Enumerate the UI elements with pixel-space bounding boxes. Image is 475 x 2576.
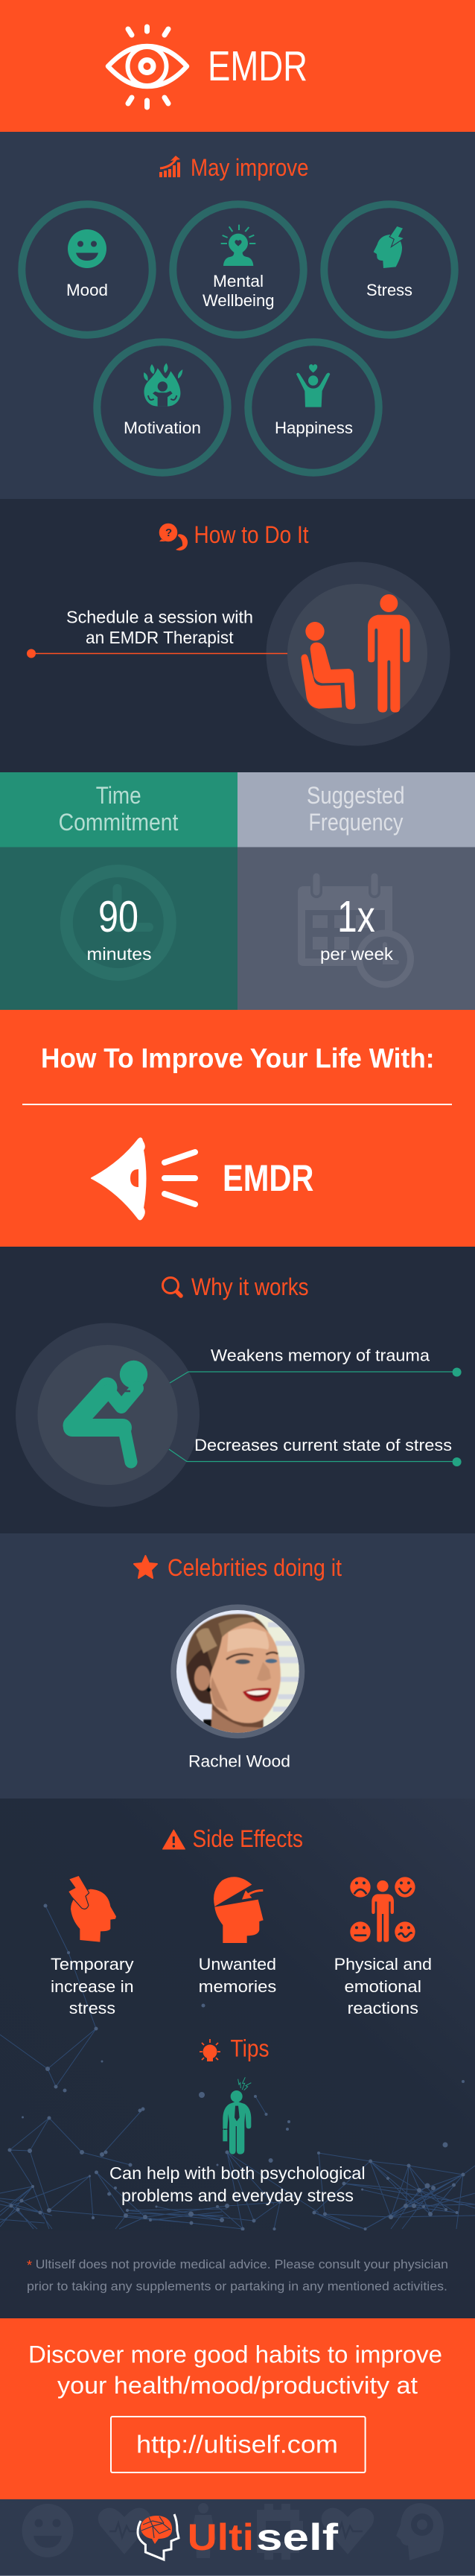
item: happiness: [248, 342, 379, 473]
callout: decreases stress: Decreases current state of stress: [194, 1436, 452, 1454]
panel: time commitment: [0, 772, 238, 1010]
item: mental wellbeing: Wellbeing: [203, 291, 274, 310]
label: rachel wood: Rachel Wood: [188, 1752, 290, 1771]
item: temporary increase in stress: stress: [69, 1999, 115, 2017]
text: tips: problems and everyday stress: [121, 2186, 354, 2205]
heading: tips: Tips: [231, 2035, 270, 2062]
panel: may improve: [0, 132, 475, 499]
heading: why it works: Why it works: [191, 1273, 308, 1300]
panel: side effects and tips: [0, 1799, 475, 2231]
text: disclaimer: prior to taking any supplements or partaking in any mentioned activities.: [27, 2279, 447, 2293]
heading: celebrities: Celebrities doing it: [168, 1554, 342, 1581]
item: physical and emotional reactions: emotional: [344, 1977, 421, 1996]
panel: call to action: [0, 2318, 475, 2499]
value: 90 minutes: minutes: [86, 944, 152, 964]
label: emdr: EMDR: [223, 1157, 313, 1199]
heading: tips: [200, 2035, 270, 2062]
callout: decreases stress: [169, 1436, 462, 1466]
heading: how to improve: How To Improve Your Life With:: [41, 1043, 435, 1074]
callout: weakens memory: [170, 1346, 462, 1383]
item: temporary increase in stress: Temporary: [51, 1955, 134, 1974]
text: schedule: an EMDR Therapist: [86, 628, 234, 647]
item: stress: Stress: [366, 281, 412, 299]
icon: clock: [66, 871, 170, 974]
label: time commitment: Time: [96, 782, 141, 809]
heading: how to do it: How to Do It: [194, 521, 309, 548]
photo: rachel wood: [170, 1604, 305, 1739]
label: suggested frequency: [307, 782, 405, 836]
item: mood: Mood: [66, 281, 108, 299]
text: discover: your health/mood/productivity at: [57, 2372, 418, 2399]
text: discover: [28, 2341, 442, 2399]
panel: disclaimer: [0, 2230, 475, 2318]
label: time commitment: [59, 782, 178, 836]
button: url: http://ultiself.com: [136, 2431, 338, 2458]
icon: eye: [108, 27, 187, 107]
logo: ultiself: [138, 2514, 338, 2560]
item: motivation: Motivation: [124, 419, 201, 437]
watermark icons: [22, 2503, 444, 2560]
text: schedule: Schedule a session with: [66, 608, 253, 627]
item: mental wellbeing: Mental: [213, 272, 264, 290]
item: physical and emotional reactions: reactions: [348, 1999, 418, 2017]
item: mental wellbeing: [173, 204, 304, 335]
label: suggested frequency: Suggested: [307, 782, 405, 809]
item: temporary increase in stress: [51, 1876, 134, 2017]
item: unwanted memories: [199, 1877, 276, 1996]
background network: [0, 1904, 475, 2231]
panel: header: [0, 0, 475, 132]
text: disclaimer: Ultiself does not provide medical advice. Please consult your physician: [36, 2257, 448, 2271]
item: happiness: Happiness: [275, 419, 353, 437]
item: stress: [324, 204, 455, 335]
label: suggested frequency: Frequency: [308, 809, 404, 836]
value: 90 minutes: 90: [98, 892, 138, 941]
item: physical and emotional reactions: Physical and: [334, 1955, 432, 1974]
item: mood: [22, 204, 153, 335]
item: motivation: [97, 342, 228, 473]
panel: celebrities: [0, 1533, 475, 1799]
heading: may improve: May improve: [191, 154, 308, 181]
value: 1x per week: [320, 892, 394, 964]
title: EMDR: [208, 42, 307, 90]
panel: why it works: [0, 1247, 475, 1533]
label: time commitment: Commitment: [59, 809, 178, 836]
text: disclaimer: *: [27, 2258, 32, 2273]
heading: how to do it: [159, 521, 309, 550]
value: 1x per week: 1x: [337, 892, 375, 941]
text: disclaimer: [27, 2257, 448, 2293]
value: 90 minutes: [86, 892, 152, 964]
text: tips: [109, 2163, 366, 2205]
logo: ultiself: Ulti: [188, 2516, 254, 2558]
item: physical and emotional reactions: [334, 1877, 432, 2017]
icon: half eye: [92, 1138, 195, 1220]
button: url: [111, 2417, 366, 2472]
icon: stressed businessman: [223, 2077, 251, 2154]
logo: ultiself: self: [256, 2516, 338, 2558]
text: discover: Discover more good habits to improve: [28, 2341, 442, 2368]
value: 1x per week: per week: [320, 944, 394, 964]
item: temporary increase in stress: increase in: [51, 1977, 134, 1996]
text: schedule: [66, 608, 253, 647]
item: unwanted memories: memories: [199, 1977, 276, 1996]
panel: how to improve banner: [0, 1010, 475, 1247]
callout: weakens memory: Weakens memory of trauma: [211, 1346, 430, 1365]
icon: calendar: [298, 877, 414, 988]
heading: how to do it: ?: [165, 527, 172, 539]
text: tips: Can help with both psychological: [109, 2163, 366, 2183]
panel: suggested frequency: [238, 772, 475, 1010]
illustration: therapist and client: [27, 562, 450, 746]
panel: how to do it: [0, 499, 475, 772]
panel: footer: [0, 2499, 475, 2576]
illustration: stressed person: [16, 1323, 200, 1507]
heading: side effects: Side Effects: [192, 1825, 303, 1852]
item: unwanted memories: Unwanted: [199, 1955, 276, 1974]
